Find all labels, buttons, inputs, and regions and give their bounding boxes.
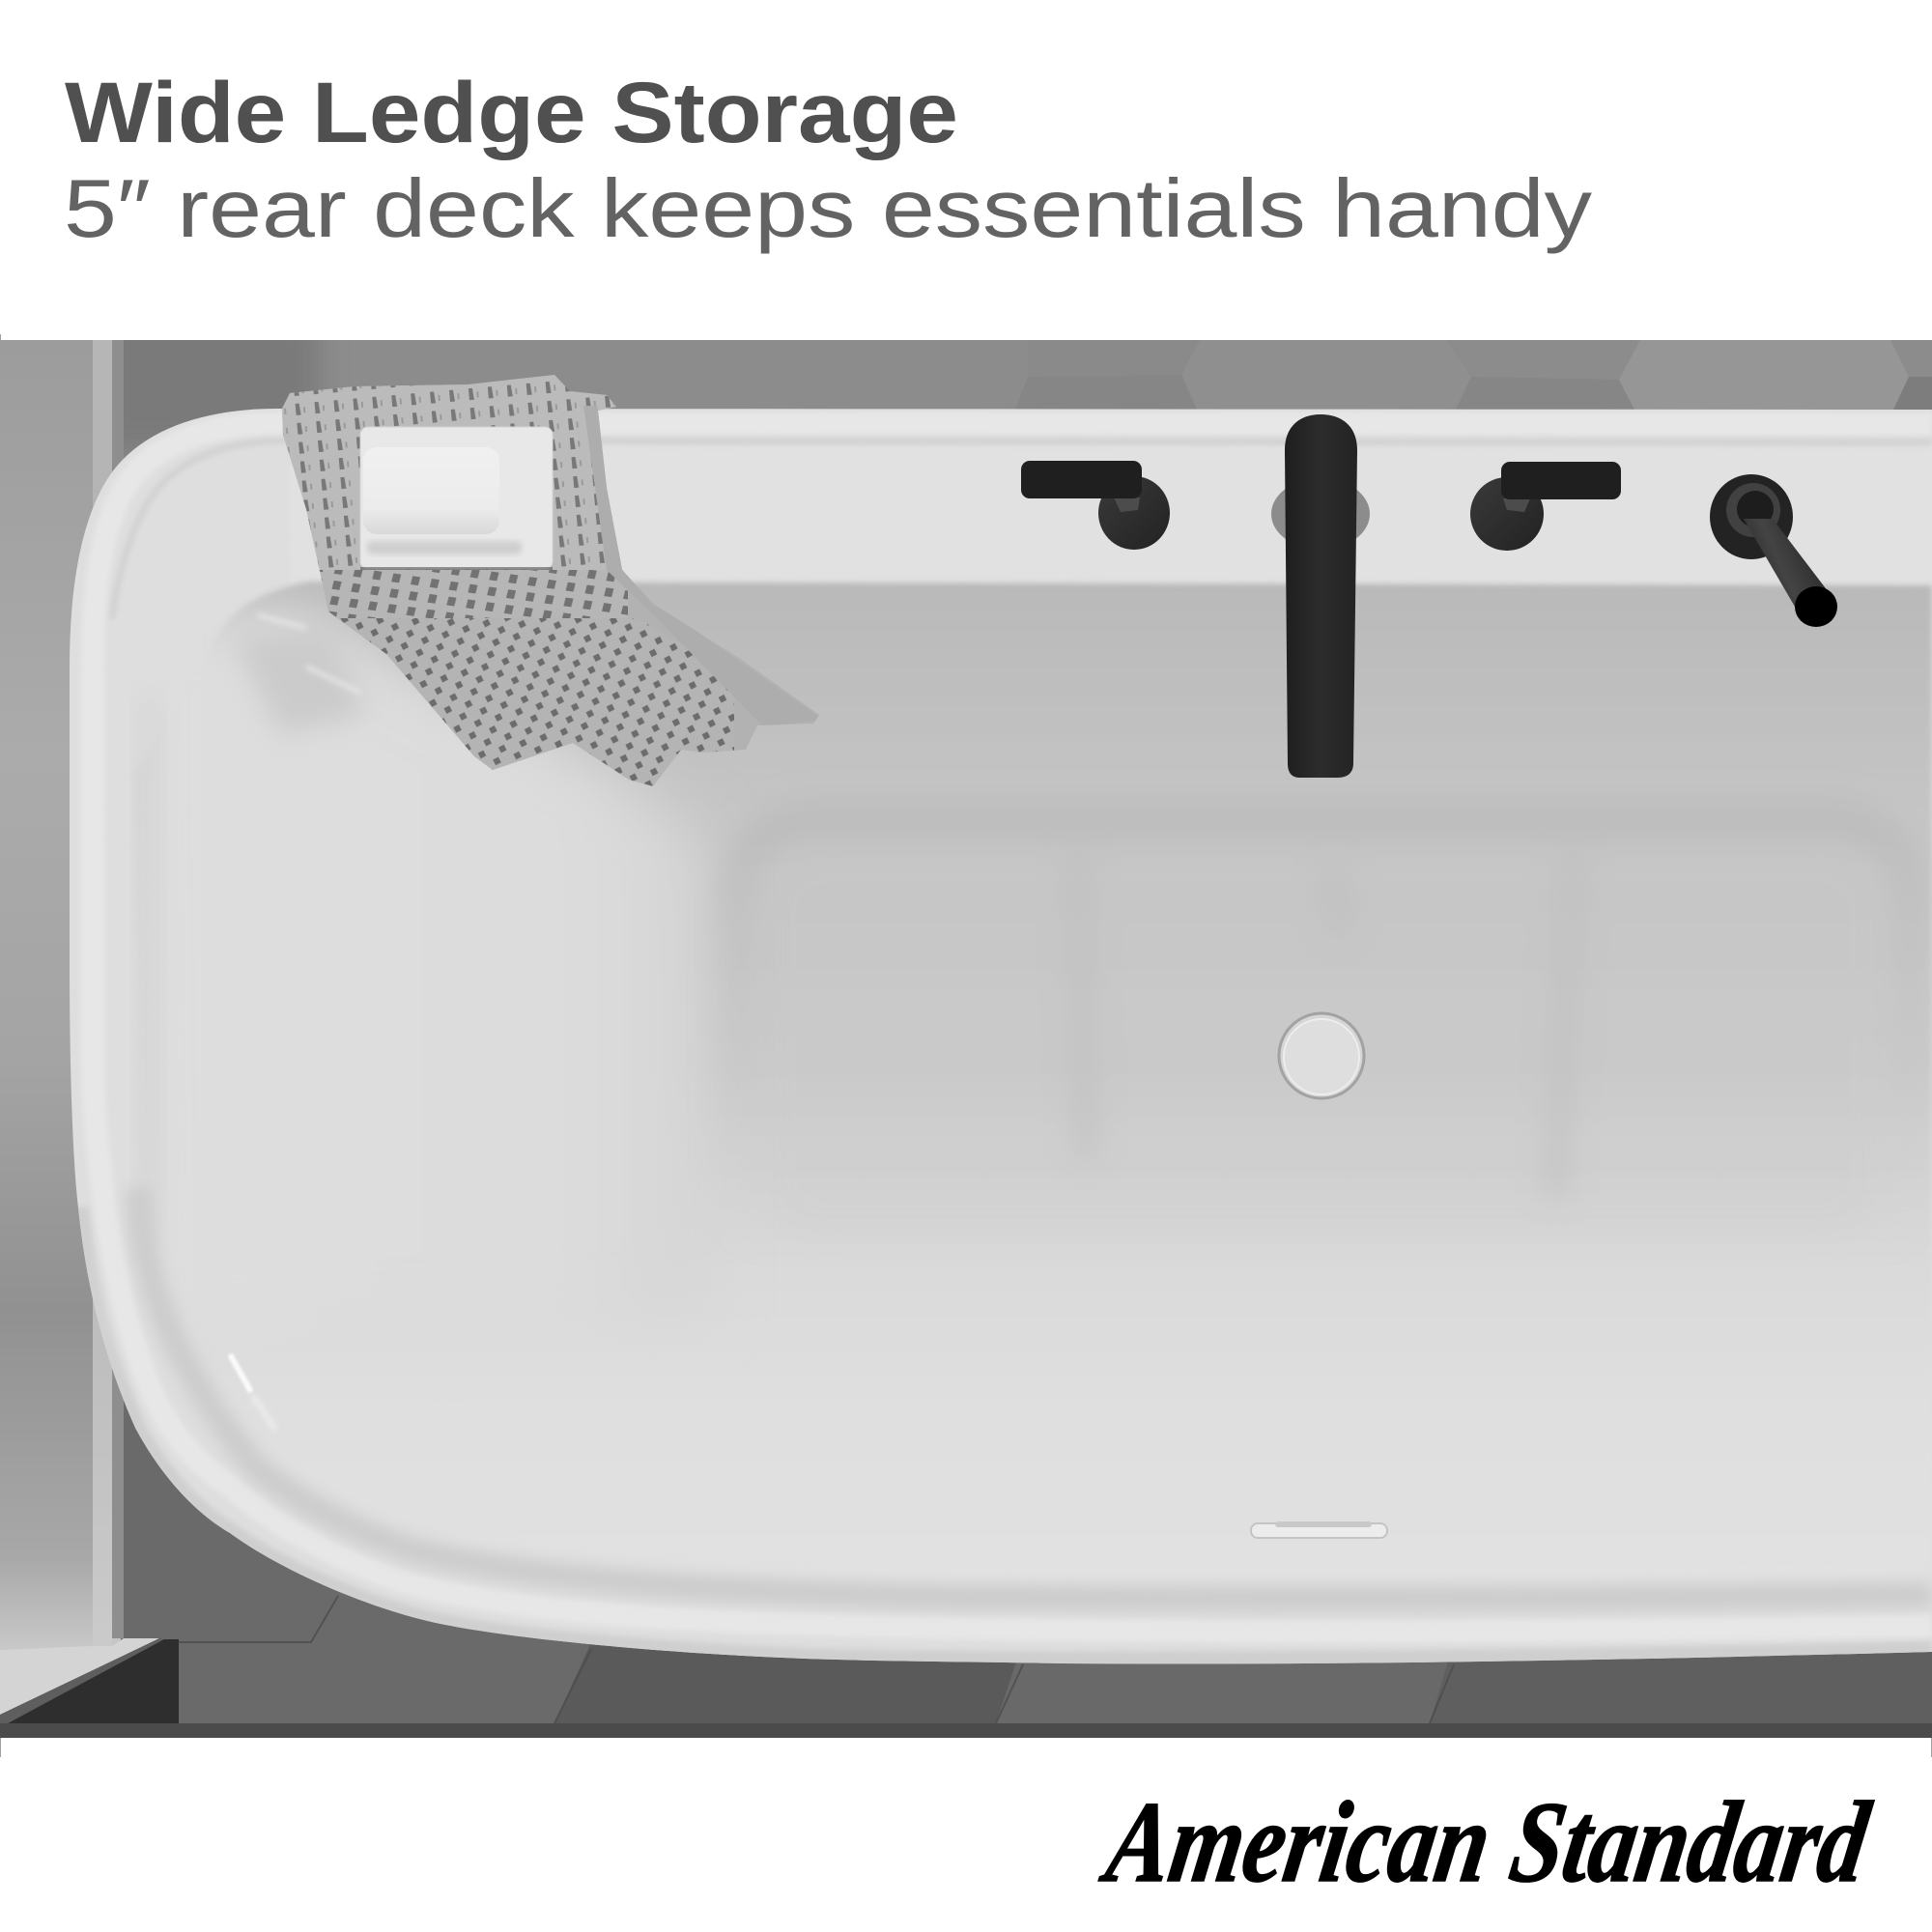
hand shower spout xyxy=(1710,474,1837,627)
inner basin xyxy=(736,819,1910,1254)
photo: bathtub from above xyxy=(0,309,1932,1738)
edge ticks xyxy=(0,334,1932,1757)
bowl glint xyxy=(230,1354,251,1392)
basin floor seams xyxy=(1077,850,1573,1198)
floor tiles xyxy=(0,340,1932,1723)
towel xyxy=(270,367,831,802)
overflow slot xyxy=(1251,1521,1387,1538)
soap dish xyxy=(360,427,553,570)
bowl xyxy=(228,580,1932,1213)
rim groove xyxy=(112,440,1932,618)
rear deck xyxy=(290,445,1932,585)
dark corner wedge xyxy=(8,1639,179,1723)
groove shadow xyxy=(138,1188,1932,1598)
faucet: right lever handle xyxy=(1470,462,1621,551)
drain xyxy=(1279,1013,1364,1098)
shaded tile top left xyxy=(124,340,319,455)
title: Wide Ledge Storage xyxy=(65,64,958,160)
tub outer lip xyxy=(70,409,1932,1663)
lower outer lip shade xyxy=(78,1208,1932,1662)
faucet: left lever handle xyxy=(1021,461,1170,550)
bowl recess at left xyxy=(242,637,359,731)
subtitle: 5″ rear deck keeps essentials handy xyxy=(64,163,1593,255)
tub xyxy=(70,409,1932,1663)
rim band xyxy=(93,423,1932,1631)
bowl left glow xyxy=(135,590,701,1212)
soap bar xyxy=(363,447,499,534)
dark ledge band xyxy=(0,1723,1932,1738)
faucet: centre spout xyxy=(1271,414,1370,778)
wall panel at left xyxy=(0,340,159,1715)
